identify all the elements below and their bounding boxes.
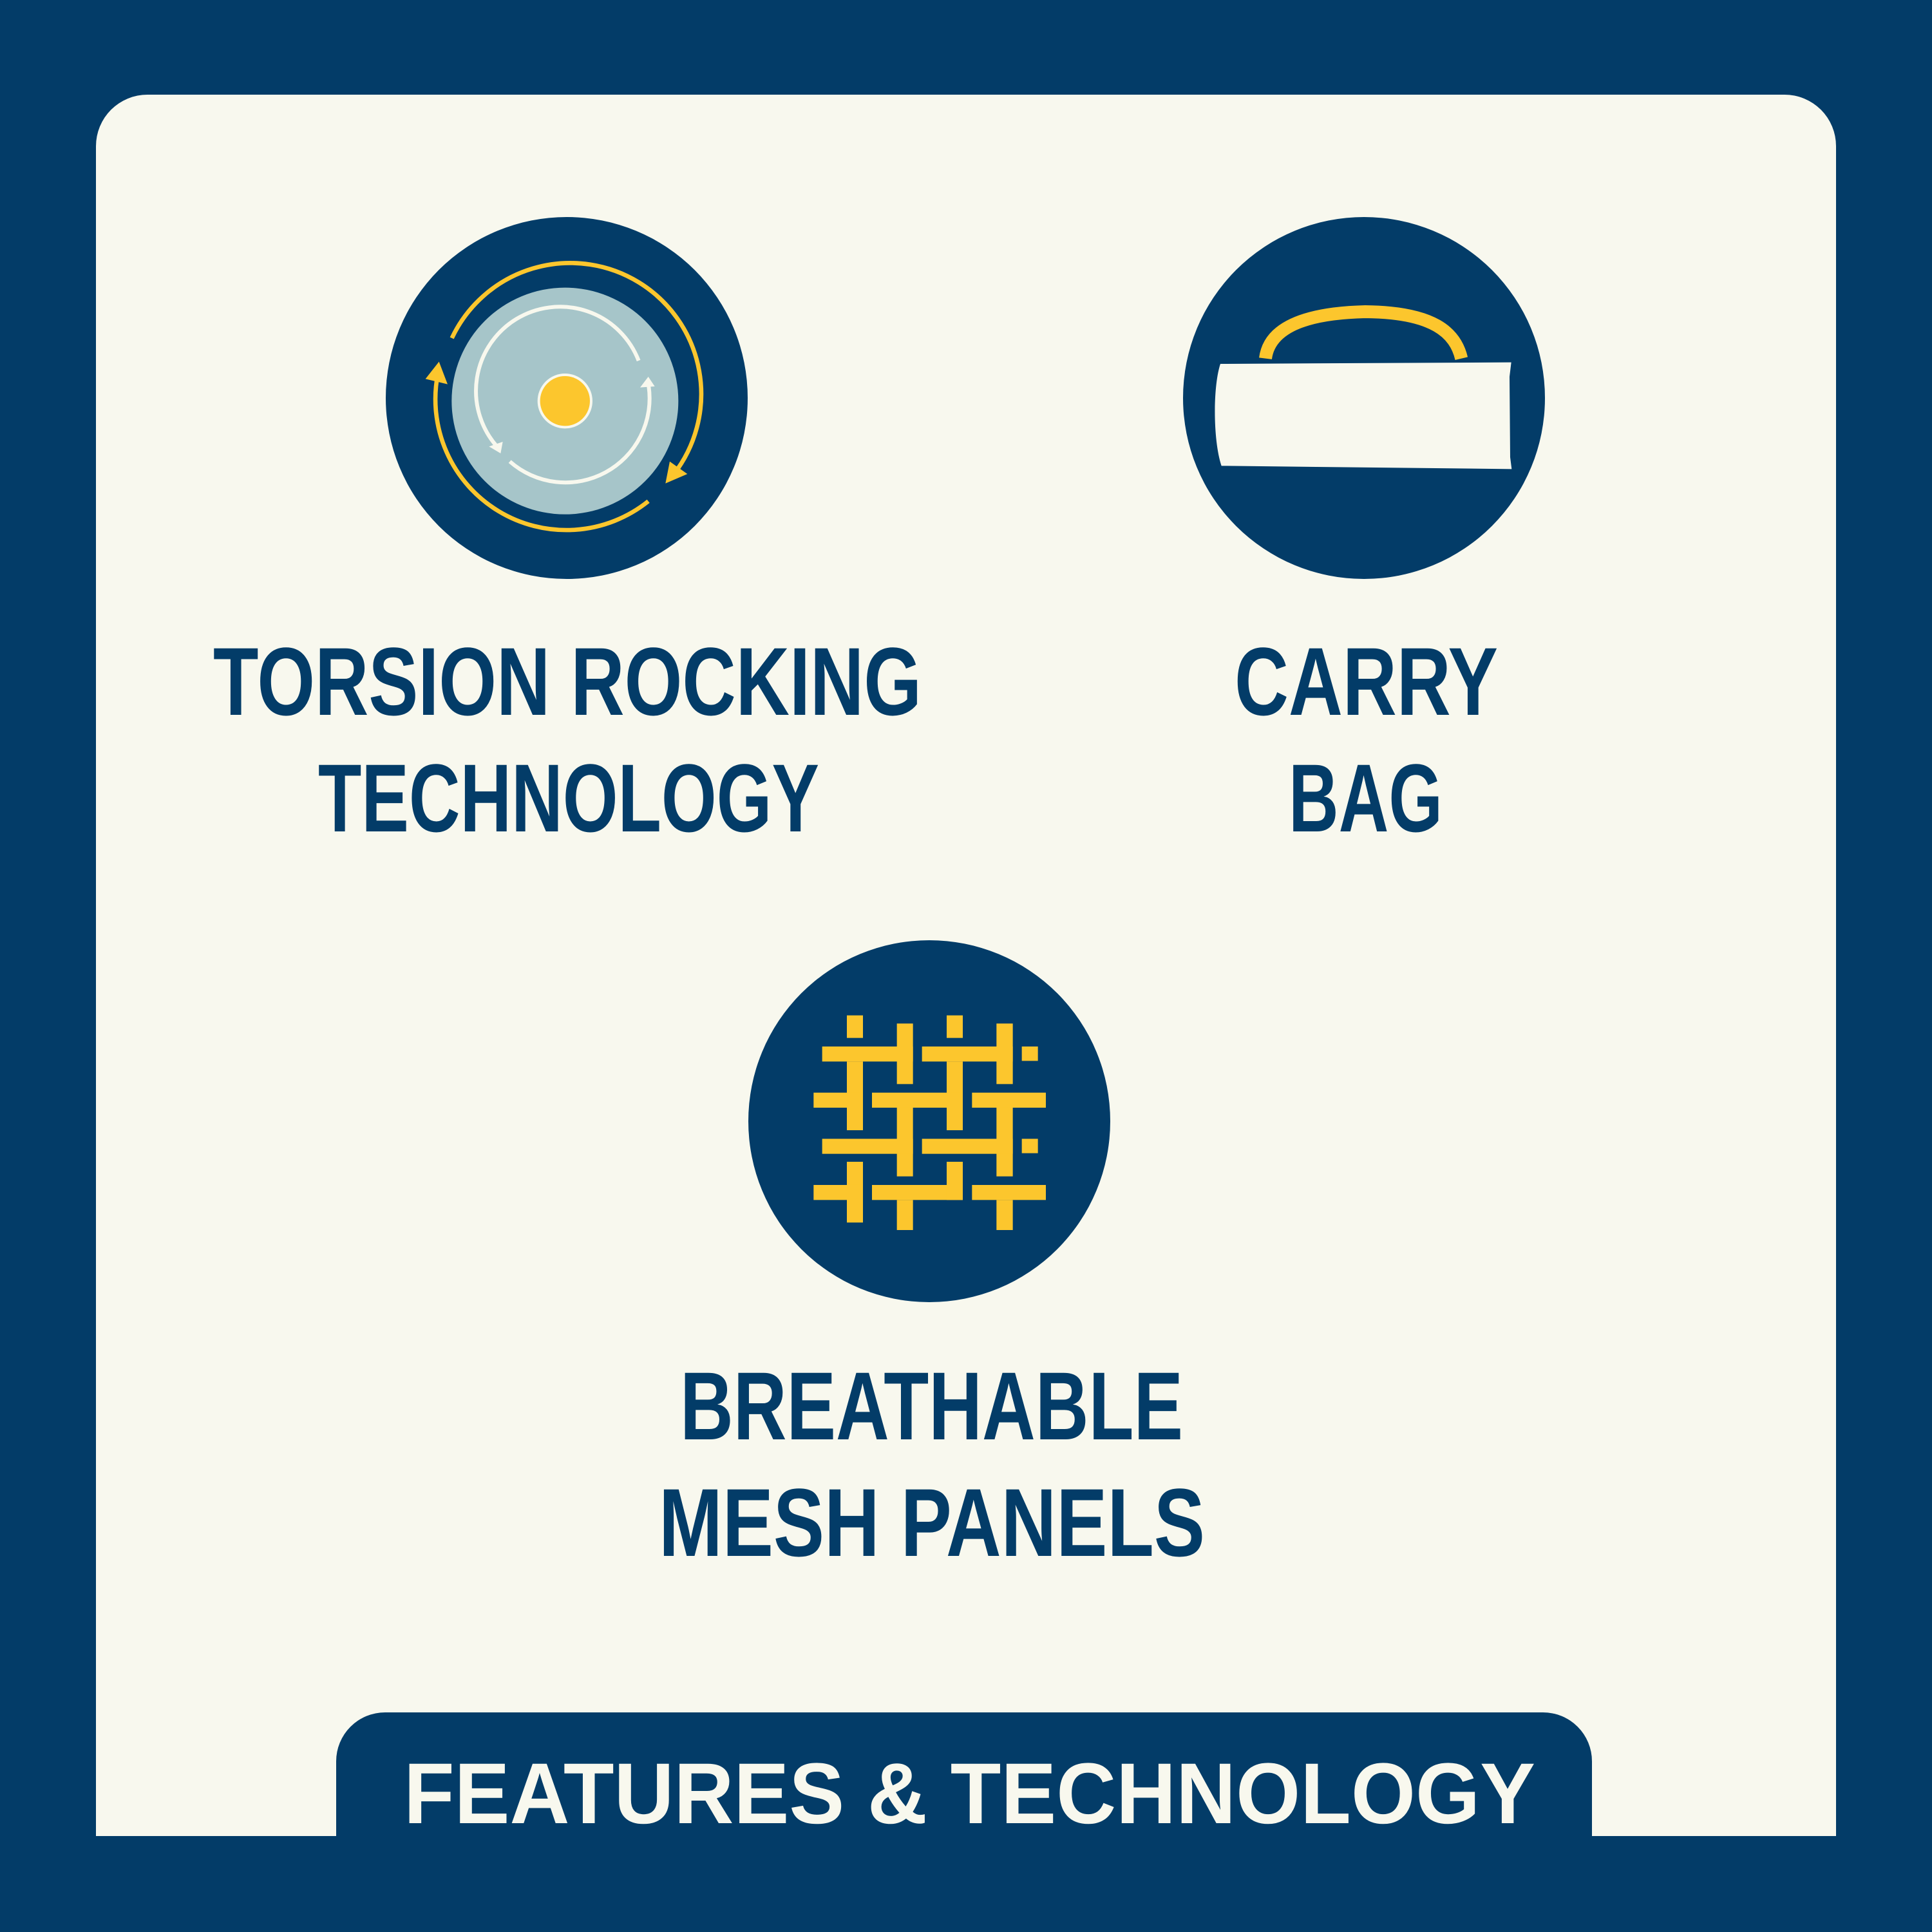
heading: carry bag — [1235, 627, 1498, 852]
heading: breathable mesh panels: BREATHABLE — [680, 1352, 1183, 1460]
heading: breathable mesh panels — [659, 1352, 1205, 1577]
footer title: FEATURES & TECHNOLOGY — [404, 1746, 1535, 1842]
icon: torsion rocking — [386, 217, 748, 579]
icon: carry bag — [1183, 217, 1545, 579]
heading: torsion rocking technology: TORSION ROCKING — [213, 627, 922, 735]
heading: carry bag: BAG — [1289, 744, 1443, 852]
icon: mesh — [748, 940, 1110, 1302]
heading: torsion rocking technology: TECHNOLOGY — [318, 744, 819, 852]
heading: torsion rocking technology — [213, 627, 922, 852]
footer tab — [336, 1712, 1592, 1932]
heading: breathable mesh panels: MESH PANELS — [659, 1468, 1205, 1577]
heading: carry bag: CARRY — [1235, 627, 1498, 735]
